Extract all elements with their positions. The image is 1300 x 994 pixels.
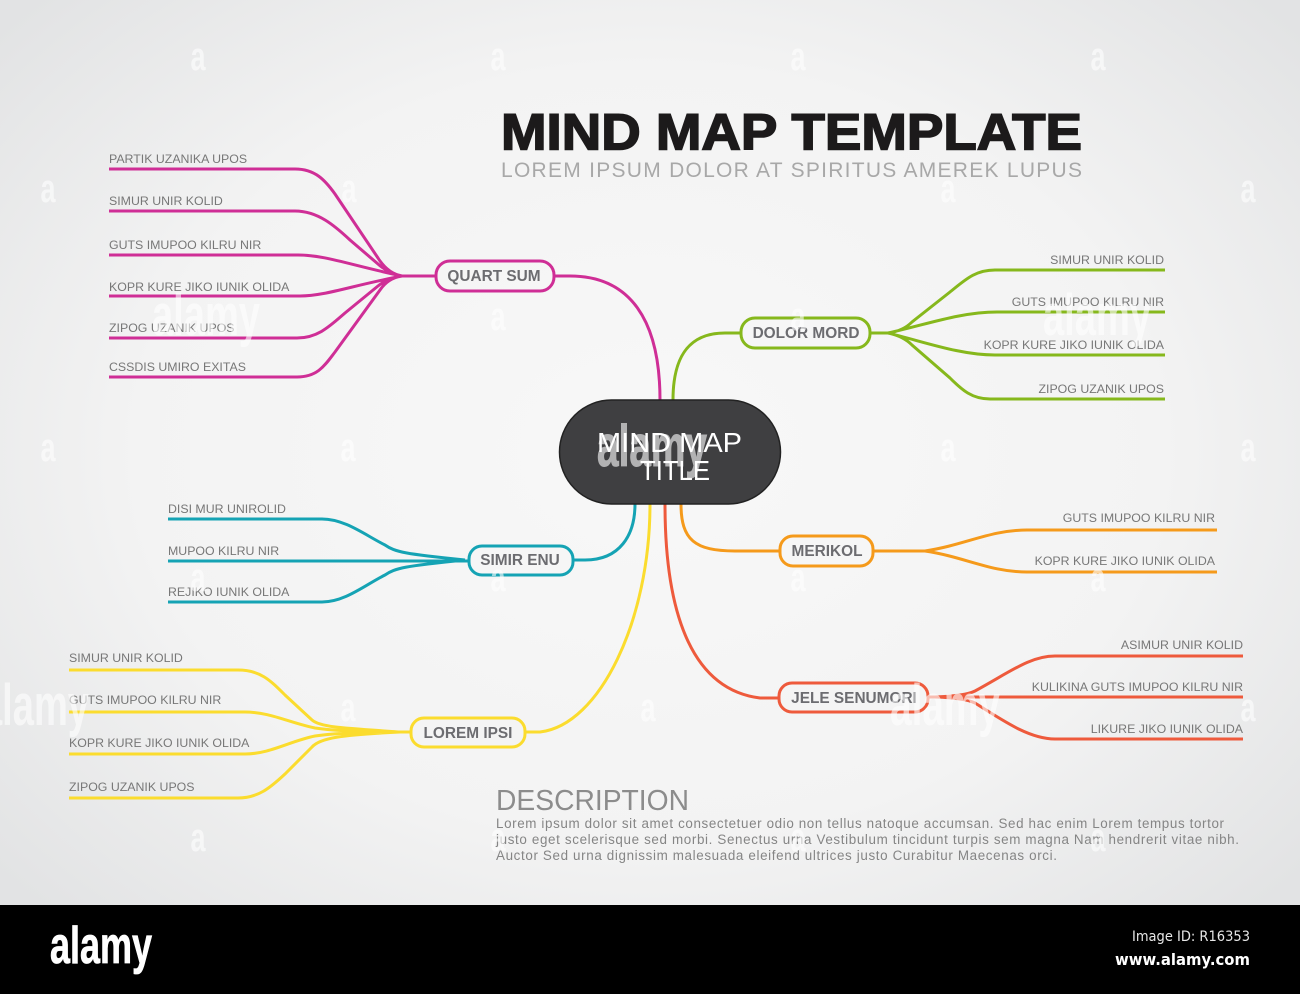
labels: quart sum: CSSDIS UMIRO EXITAS bbox=[109, 360, 246, 374]
watermarks: a bbox=[340, 426, 356, 470]
node: lorem ipsi: LOREM IPSI bbox=[424, 725, 512, 742]
labels: dolor mord: SIMUR UNIR KOLID bbox=[1050, 253, 1164, 267]
watermarks: a bbox=[190, 35, 206, 79]
watermarks: a bbox=[790, 295, 806, 339]
watermarks: a bbox=[790, 816, 806, 860]
labels: jele senumori bbox=[1032, 638, 1244, 736]
node: simir enu: SIMIR ENU bbox=[480, 552, 560, 569]
image id: Image ID: R16353 bbox=[1132, 929, 1250, 945]
branch: lorem ipsi bbox=[69, 504, 650, 798]
description: justo eget scelerisque sed morbi. Senectus urna Vestibulum tincidunt turpis sem magna Nam hendrerit vitae nibh. bbox=[495, 832, 1239, 847]
node: quart sum bbox=[436, 261, 554, 291]
central node: MIND MAP bbox=[597, 427, 742, 458]
watermarks: a bbox=[490, 556, 506, 600]
branch: jele senumori bbox=[665, 504, 1244, 739]
watermarks: a bbox=[1240, 426, 1256, 470]
description: Lorem ipsum dolor sit amet consectetuer odio non tellus natoque accumsan. Sed hac enim Lorem tempus tortor bbox=[496, 816, 1225, 831]
description: DESCRIPTION bbox=[496, 785, 689, 817]
central node: alamy bbox=[597, 414, 707, 479]
node: dolor mord: DOLOR MORD bbox=[753, 325, 859, 342]
node: jele senumori bbox=[779, 683, 928, 712]
branch: quart sum bbox=[109, 152, 660, 400]
node: jele senumori: JELE SENUMORI bbox=[791, 690, 917, 707]
labels: lorem ipsi: ZIPOG UZANIK UPOS bbox=[69, 780, 195, 794]
node: lorem ipsi bbox=[411, 718, 525, 747]
labels: quart sum: ZIPOG UZANIK UPOS bbox=[109, 321, 235, 335]
subtitle: LOREM IPSUM DOLOR AT SPIRITUS AMEREK LUPUS bbox=[501, 159, 1082, 182]
labels: lorem ipsi: GUTS IMUPOO KILRU NIR bbox=[69, 693, 221, 707]
branch: simir enu bbox=[168, 502, 635, 602]
watermarks: alamy bbox=[152, 283, 260, 348]
labels: lorem ipsi: SIMUR UNIR KOLID bbox=[69, 651, 183, 665]
watermarks: a bbox=[1240, 686, 1256, 730]
watermarks: a bbox=[790, 35, 806, 79]
watermarks: a bbox=[1090, 35, 1106, 79]
labels: quart sum: PARTIK UZANIKA UPOS bbox=[109, 152, 247, 166]
labels: quart sum: KOPR KURE JIKO IUNIK OLIDA bbox=[109, 280, 290, 294]
labels: dolor mord: KOPR KURE JIKO IUNIK OLIDA bbox=[984, 338, 1165, 352]
labels: merikol bbox=[1035, 511, 1216, 568]
watermarks: a bbox=[490, 295, 506, 339]
branch: merikol bbox=[681, 504, 1217, 572]
watermarks: a bbox=[1090, 816, 1106, 860]
labels: lorem ipsi: KOPR KURE JIKO IUNIK OLIDA bbox=[69, 736, 250, 750]
watermarks: a bbox=[190, 816, 206, 860]
description: Auctor Sed urna dignissim malesuada eleifend ultrices justo Curabitur Maecenas orci. bbox=[496, 848, 1057, 863]
central node bbox=[560, 400, 780, 504]
labels: jele senumori: LIKURE JIKO IUNIK OLIDA bbox=[1091, 722, 1244, 736]
watermarks: a bbox=[790, 556, 806, 600]
labels: dolor mord bbox=[984, 253, 1165, 396]
labels: quart sum: SIMUR UNIR KOLID bbox=[109, 194, 223, 208]
labels: simir enu bbox=[168, 502, 290, 599]
watermarks: a bbox=[1240, 167, 1256, 211]
node: merikol bbox=[780, 536, 873, 566]
watermarks: a bbox=[190, 556, 206, 600]
labels: quart sum: GUTS IMUPOO KILRU NIR bbox=[109, 238, 261, 252]
labels: jele senumori: ASIMUR UNIR KOLID bbox=[1121, 638, 1243, 652]
watermarks: a bbox=[40, 167, 56, 211]
labels: jele senumori: KULIKINA GUTS IMUPOO KILRU NIR bbox=[1032, 680, 1243, 694]
labels: simir enu: DISI MUR UNIROLID bbox=[168, 502, 286, 516]
watermarks: alamy bbox=[1043, 283, 1151, 348]
labels: lorem ipsi bbox=[69, 651, 250, 794]
labels: simir enu: REJIKO IUNIK OLIDA bbox=[168, 585, 290, 599]
watermarks: a bbox=[640, 686, 656, 730]
description bbox=[495, 785, 1239, 863]
watermarks: a bbox=[40, 426, 56, 470]
watermarks: a bbox=[940, 426, 956, 470]
footer bar bbox=[0, 905, 1300, 994]
watermarks: a bbox=[940, 167, 956, 211]
labels: simir enu: MUPOO KILRU NIR bbox=[168, 544, 279, 558]
watermarks: a bbox=[490, 816, 506, 860]
watermarks: a bbox=[490, 35, 506, 79]
website: www.alamy.com bbox=[1115, 950, 1250, 969]
labels: dolor mord: GUTS IMUPOO KILRU NIR bbox=[1012, 295, 1164, 309]
watermarks: a bbox=[340, 686, 356, 730]
branch: dolor mord bbox=[673, 253, 1165, 400]
labels: merikol: GUTS IMUPOO KILRU NIR bbox=[1063, 511, 1215, 525]
footer logo: alamy bbox=[50, 917, 152, 975]
node: quart sum: QUART SUM bbox=[447, 268, 541, 285]
watermarks: a bbox=[1090, 556, 1106, 600]
watermarks: a bbox=[342, 167, 357, 211]
node: simir enu bbox=[469, 546, 573, 575]
node: merikol: MERIKOL bbox=[792, 543, 862, 560]
labels: dolor mord: ZIPOG UZANIK UPOS bbox=[1038, 382, 1164, 396]
labels: quart sum bbox=[109, 152, 290, 374]
labels: merikol: KOPR KURE JIKO IUNIK OLIDA bbox=[1035, 554, 1216, 568]
central node: TITLE bbox=[640, 455, 710, 486]
title: MIND MAP TEMPLATE bbox=[501, 104, 1082, 160]
node: dolor mord bbox=[741, 318, 870, 348]
watermarks: alamy bbox=[890, 673, 1000, 738]
